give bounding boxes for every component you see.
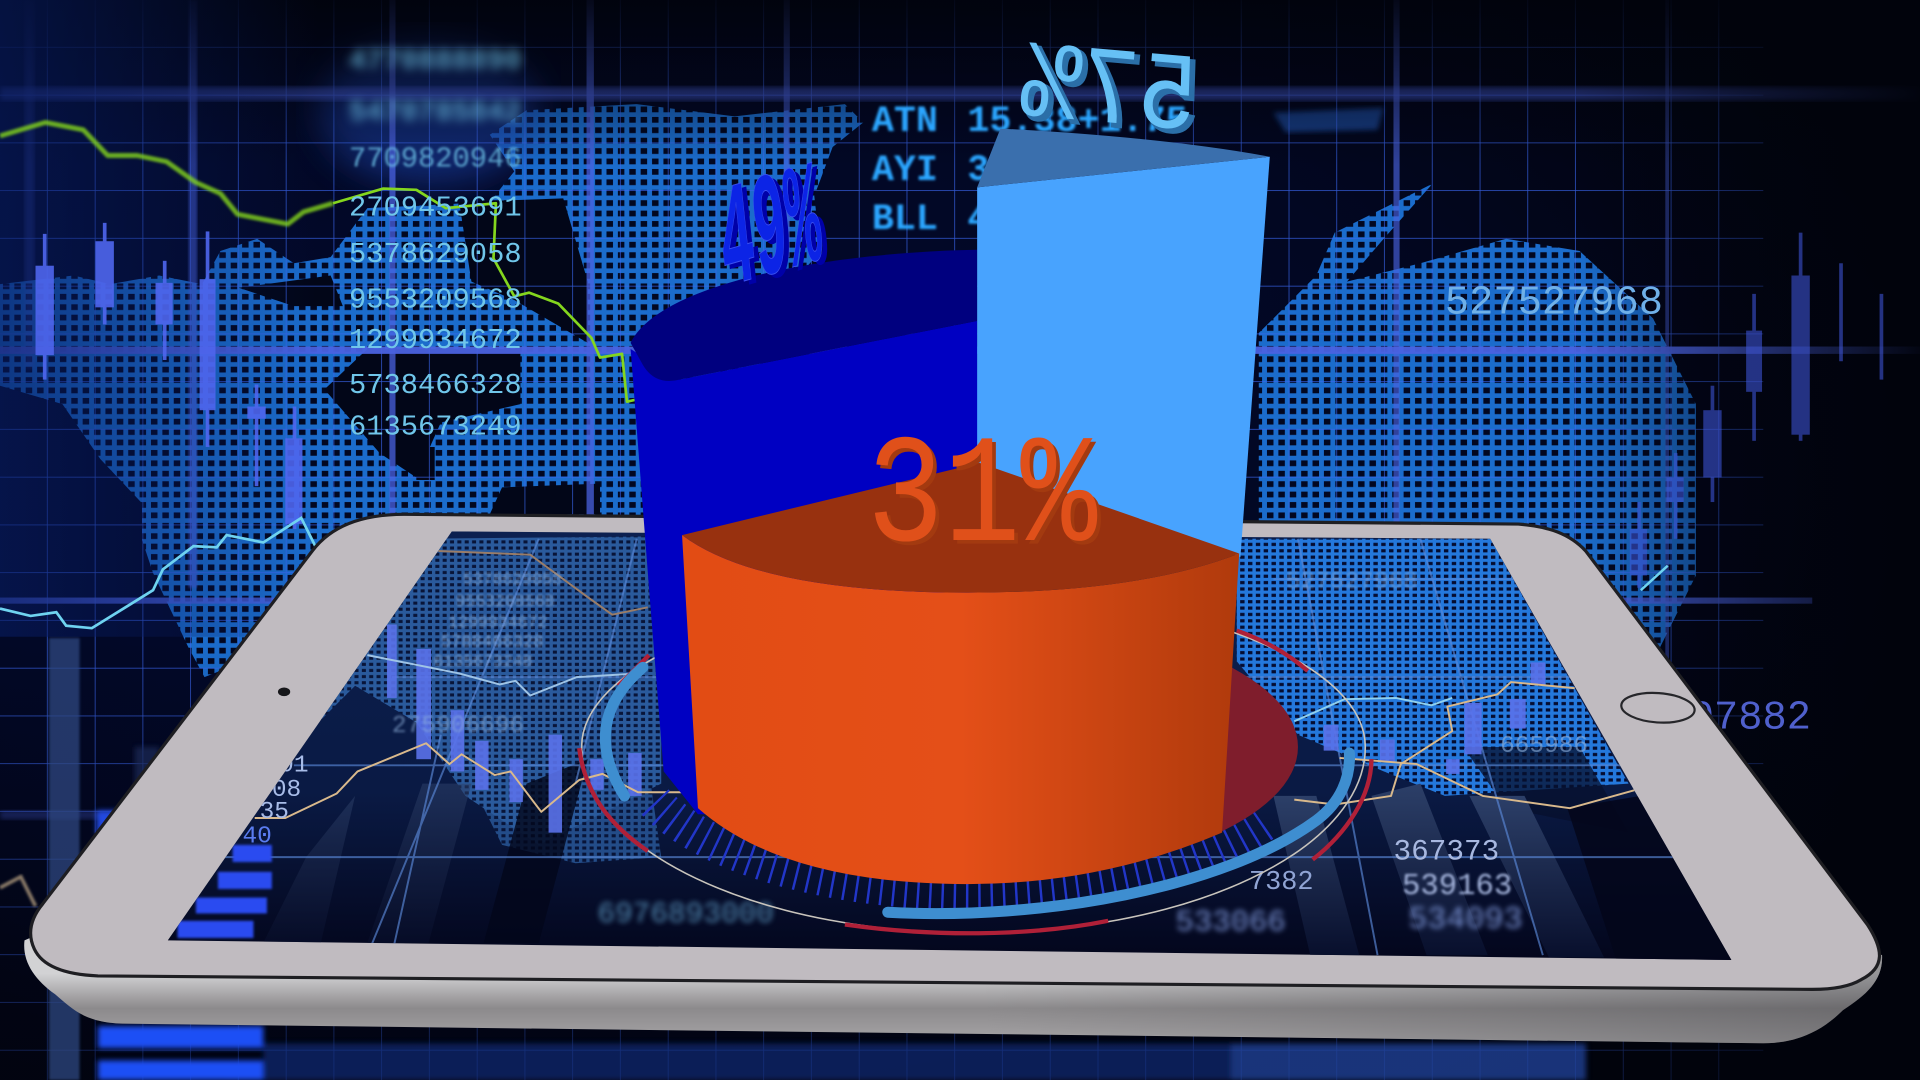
screen map left bbox=[318, 536, 661, 845]
map: dark seas bbox=[239, 198, 600, 514]
screen candlesticks bbox=[387, 624, 1545, 833]
upper left numbers bbox=[433, 570, 562, 671]
pie slice: orange 31 percent bbox=[682, 463, 1239, 884]
right number: 527527968 bbox=[1445, 280, 1663, 326]
number column bbox=[349, 45, 522, 444]
thick grid lines bbox=[0, 0, 1920, 819]
blurred numbers: 4770888890 bbox=[349, 45, 522, 78]
screen trend lines bbox=[255, 551, 1636, 818]
blurred lower number: 6976893000 bbox=[598, 898, 774, 931]
lower right numbers bbox=[1176, 836, 1523, 941]
soft number: 7709820946 bbox=[349, 143, 522, 176]
red ring arcs bbox=[579, 631, 1371, 933]
thin white ring bbox=[580, 632, 1366, 927]
candlesticks left bbox=[36, 223, 302, 529]
screen bottom columns bbox=[263, 759, 1731, 960]
numbers: 9553209568 bbox=[349, 283, 522, 316]
world map: left and centre continents bbox=[0, 104, 863, 677]
numbers: 1299934672 bbox=[349, 324, 522, 357]
thick blue ring arcs bbox=[605, 667, 1349, 914]
upper left numbers: 5788466328 bbox=[441, 634, 544, 653]
glow behind blurred numbers bbox=[318, 37, 539, 184]
upper left numbers: 5378629058 bbox=[463, 570, 562, 589]
pie slice: dark blue 49 percent bbox=[631, 250, 980, 814]
cyan trend line bbox=[0, 518, 316, 628]
dark red disc bbox=[1222, 668, 1298, 832]
upper left numbers: 1299934672 bbox=[448, 613, 547, 632]
pie slice: light blue 57 percent bbox=[977, 129, 1270, 557]
lower right numbers: 367373 bbox=[1393, 836, 1499, 869]
left edge numbers bbox=[244, 756, 308, 842]
ticker list: 3 bbox=[967, 150, 989, 192]
numbers: 6135673249 bbox=[349, 411, 522, 444]
screen map lower bbox=[484, 788, 662, 864]
lower right numbers: 539163 bbox=[1402, 870, 1512, 904]
label 31 percent: 31% bbox=[867, 413, 1097, 587]
numbers: 5738466328 bbox=[349, 369, 522, 402]
tablet silver edge bbox=[24, 735, 1882, 1043]
ticker list: ATN bbox=[872, 101, 938, 143]
ticker list: 15.38+1.75 bbox=[967, 101, 1188, 143]
3D pie chart: 49% bbox=[717, 140, 834, 334]
lower right numbers: 533066 bbox=[1176, 907, 1286, 941]
upper left numbers: 9553208568 bbox=[456, 592, 555, 611]
label 57 percent mirrored: 57% bbox=[1020, 28, 1206, 168]
right small number: 07882 bbox=[1690, 696, 1811, 742]
tablet screen bbox=[159, 527, 1739, 967]
candlesticks right bbox=[1630, 233, 1883, 588]
screen grid lines bbox=[171, 539, 1714, 955]
lower right numbers: 534093 bbox=[1408, 902, 1523, 938]
lower right numbers: 7382 bbox=[1249, 868, 1314, 898]
tablet home button bbox=[1620, 691, 1696, 725]
label 31 percent: 31% bbox=[871, 417, 1101, 591]
screen map right bbox=[1237, 539, 1629, 796]
world map: right continent bbox=[1259, 184, 1696, 661]
ticker list bbox=[872, 101, 1188, 241]
3D pie chart bbox=[631, 24, 1270, 884]
cyan line right bbox=[1641, 566, 1668, 590]
bright blurred numbers under tablet bbox=[97, 811, 1586, 1080]
left edge numbers: 40 bbox=[242, 823, 272, 850]
numbers: 5378629058 bbox=[349, 238, 522, 271]
numbers: 2709453691 bbox=[349, 192, 522, 225]
map: blurred upper right islands bbox=[1273, 108, 1384, 132]
blurred numbers: 5470785842 bbox=[349, 96, 522, 129]
left edge numbers: 01 bbox=[279, 752, 309, 779]
upper right number: 527527968 bbox=[1286, 569, 1418, 596]
blurred numbers bbox=[349, 45, 522, 129]
screen dark sea bbox=[1464, 747, 1610, 821]
ticker list: BLL bbox=[872, 199, 938, 241]
ticker list: AYI bbox=[872, 150, 938, 192]
screen numbers bbox=[242, 569, 1588, 941]
tablet bbox=[24, 514, 1882, 1043]
tablet edge shade right bbox=[980, 955, 1882, 1043]
screen left blue number bars bbox=[178, 845, 272, 938]
lower left bars bbox=[0, 638, 159, 1080]
label 49 percent skewed bbox=[712, 136, 834, 336]
label 57 percent mirrored: 57% bbox=[1016, 24, 1202, 164]
left edge numbers: 35 bbox=[260, 799, 289, 826]
mid left number: 275906696 bbox=[392, 713, 524, 740]
tablet camera bbox=[278, 688, 290, 696]
mid right number: 665986 bbox=[1500, 733, 1588, 760]
left edge numbers: 08 bbox=[272, 777, 301, 804]
upper left numbers: 6135673248 bbox=[433, 652, 533, 671]
3D pie chart: 49% bbox=[712, 137, 829, 331]
numbers bbox=[349, 192, 522, 444]
ticker list: 4 bbox=[967, 199, 989, 241]
tick ring bbox=[655, 802, 1267, 892]
tablet front bezel bbox=[31, 514, 1879, 989]
green trend line bbox=[0, 122, 649, 402]
